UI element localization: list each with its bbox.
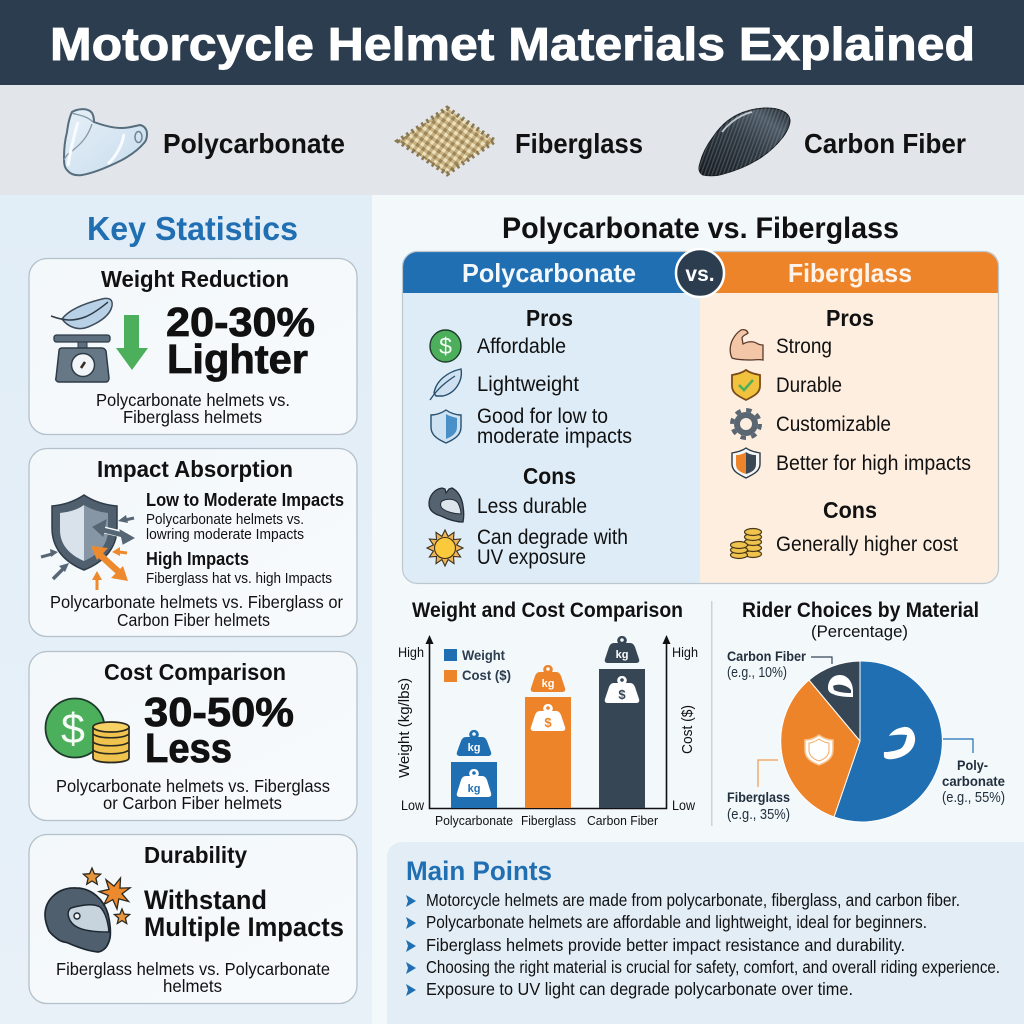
- bar: carbon fiber: kg: [616, 649, 628, 661]
- category labels: Polycarbonate: [435, 813, 513, 828]
- label: Fiberglass: Fiberglass: [515, 128, 643, 159]
- panel: weight reduction: [29, 258, 357, 434]
- caption: helmets: [163, 976, 222, 996]
- polycarbonate column: Can degrade with: [477, 526, 628, 549]
- fiberglass column: Customizable: [776, 413, 891, 436]
- icon: orange and dark shield: [732, 448, 760, 478]
- category labels: [435, 813, 659, 828]
- bar: fiberglass: $: [544, 715, 552, 730]
- legend: Cost ($): [462, 667, 511, 683]
- fiberglass column: Strong: [776, 335, 832, 358]
- axis labels: [397, 644, 698, 813]
- heading: comparison: Polycarbonate vs. Fiberglass: [502, 212, 899, 245]
- axis labels: High: [672, 644, 698, 660]
- label: polycarbonate: [942, 739, 1005, 806]
- panel: main points: [387, 842, 1024, 1024]
- label: fiberglass: Fiberglass: [727, 789, 790, 805]
- polycarbonate column: Lightweight: [477, 373, 579, 396]
- icon: sun: [427, 530, 463, 566]
- caption: or Carbon Fiber helmets: [103, 793, 282, 813]
- bar: carbon fiber: $: [618, 687, 626, 702]
- vs badge: vs.: [685, 263, 715, 286]
- chart: rider choices pie: (Percentage): [811, 622, 908, 641]
- bullet list: Exposure to UV light can degrade polycarbonate over time.: [426, 979, 853, 999]
- chart title: Rider Choices by Material: [742, 599, 979, 622]
- polycarbonate column: Less durable: [477, 495, 587, 518]
- label: fiberglass: [727, 760, 790, 823]
- bar: polycarbonate: kg: [468, 783, 480, 795]
- heading: Impact Absorption: [97, 456, 293, 482]
- axis labels: Low: [672, 797, 696, 813]
- fiberglass column: Fiberglass: [788, 258, 912, 288]
- icon: coin stacks: [730, 528, 762, 558]
- label: carbon fiber: Carbon Fiber: [727, 648, 806, 664]
- caption: Carbon Fiber helmets: [117, 610, 270, 630]
- icon: feather on scale: [51, 298, 112, 382]
- bar: carbon fiber: [599, 636, 645, 808]
- fiberglass column: Pros: [826, 305, 874, 331]
- materials strip: [0, 85, 1024, 195]
- icon: green down arrow: [116, 315, 148, 370]
- text: low to moderate: Low to Moderate Impacts: [146, 490, 344, 510]
- axes: [430, 642, 666, 808]
- pie slice: fiberglass 35%: [781, 680, 860, 817]
- fiberglass column: [700, 251, 999, 583]
- arrows: orange impacts: [91, 546, 128, 590]
- icon: shield with impact arrows: [41, 495, 134, 590]
- title banner: [0, 0, 1024, 85]
- fiberglass column: Better for high impacts: [776, 452, 971, 475]
- label: carbon fiber: (e.g., 10%): [727, 665, 787, 681]
- chart title: Weight and Cost Comparison: [412, 599, 683, 622]
- axis labels: Cost ($): [680, 705, 696, 754]
- vs badge: [676, 249, 724, 297]
- panel: cost comparison: Less: [145, 725, 232, 771]
- label: fiberglass: (e.g., 35%): [727, 807, 790, 823]
- caption: Fiberglass helmets vs. Polycarbonate: [56, 959, 330, 979]
- panel: comparison table: [402, 249, 999, 584]
- legend: [444, 647, 511, 683]
- stat: 20-30%: [166, 299, 315, 345]
- icon: dollar coin and stack: $: [61, 705, 85, 753]
- bar: fiberglass: kg: [542, 678, 554, 690]
- polycarbonate column: Cons: [523, 463, 576, 489]
- label: polycarbonate: Poly-: [957, 757, 988, 773]
- bar: fiberglass: [525, 665, 571, 808]
- icon: helmet with impact stars: [45, 868, 130, 952]
- bullet list: Motorcycle helmets are made from polycarbonate, fiberglass, and carbon fiber.: [426, 890, 960, 910]
- panel: weight reduction: Lighter: [167, 336, 308, 382]
- bullet list: Fiberglass helmets provide better impact resistance and durability.: [426, 935, 905, 955]
- polycarbonate column: Affordable: [477, 335, 566, 358]
- heading: Weight Reduction: [101, 266, 289, 292]
- panel: durability: Multiple Impacts: [144, 912, 344, 942]
- pie slice: carbon fiber 10%: [809, 661, 860, 741]
- bar: polycarbonate: kg: [468, 742, 480, 754]
- title banner: Motorcycle Helmet Materials Explained: [50, 18, 975, 70]
- heading: Key Statistics: Key Statistics: [87, 210, 298, 247]
- icon: feather: [430, 369, 461, 400]
- text: high impacts: Fiberglass hat vs. high Impacts: [146, 571, 332, 587]
- polycarbonate column: Pros: [526, 305, 573, 331]
- label: Carbon Fiber: Carbon Fiber: [804, 128, 966, 159]
- bullet list: [406, 890, 1000, 999]
- arrows: grey impacts: [41, 515, 134, 579]
- polycarbonate column: [403, 251, 700, 583]
- panel: impact absorption: [29, 448, 357, 636]
- label: carbon fiber: [727, 648, 832, 681]
- polycarbonate column: Polycarbonate: [462, 258, 636, 288]
- heading: Main Points: [406, 856, 552, 886]
- pie slice: polycarbonate 55%: [834, 661, 942, 822]
- icon: gold shield with check: [732, 370, 760, 400]
- label: Polycarbonate: Polycarbonate: [163, 128, 345, 159]
- text: low to moderate: [146, 490, 344, 543]
- text: high impacts: High Impacts: [146, 549, 249, 569]
- icon: blue shield: [431, 410, 461, 443]
- icon: carbon fiber shell: [699, 108, 790, 176]
- icon: gear: [732, 410, 760, 438]
- text: low to moderate: lowring moderate Impacts: [146, 527, 304, 543]
- stat: Withstand: [144, 885, 267, 915]
- fiberglass column: Cons: [823, 497, 877, 523]
- text: high impacts: [146, 549, 332, 587]
- label: polycarbonate: (e.g., 55%): [942, 790, 1005, 806]
- axis labels: High: [398, 644, 424, 660]
- heading: Cost Comparison: [104, 659, 286, 685]
- polycarbonate column: Good for low to: [477, 405, 608, 428]
- polycarbonate column: UV exposure: [477, 546, 586, 569]
- caption: Polycarbonate helmets vs.: [96, 390, 290, 410]
- icon: dollar: $: [439, 333, 452, 359]
- axis labels: Low: [401, 797, 425, 813]
- caption: Fiberglass helmets: [123, 407, 262, 427]
- text: low to moderate: Polycarbonate helmets vs.: [146, 512, 304, 528]
- category labels: Carbon Fiber: [587, 813, 659, 828]
- panel: durability: [29, 834, 357, 1004]
- legend: Weight: [462, 647, 505, 663]
- icon: flexed arm: [730, 330, 763, 360]
- category labels: Fiberglass: [521, 813, 576, 828]
- panel: cost comparison: [29, 652, 357, 820]
- icon: fiberglass weave: [398, 108, 495, 174]
- bullet list: Polycarbonate helmets are affordable and lightweight, ideal for beginners.: [426, 912, 927, 932]
- chart: weight and cost comparison: [397, 599, 698, 828]
- fiberglass column: Durable: [776, 374, 842, 397]
- icon: dollar coin and stack: [46, 698, 129, 762]
- chart: rider choices pie: [727, 599, 1005, 823]
- caption: [56, 776, 330, 813]
- heading: Durability: [144, 842, 247, 868]
- label: polycarbonate: carbonate: [942, 773, 1005, 789]
- caption: [56, 959, 330, 996]
- caption: Polycarbonate helmets vs. Fiberglass or: [50, 592, 343, 612]
- icon: polycarbonate visor: [64, 109, 147, 175]
- fiberglass column: Generally higher cost: [776, 533, 958, 556]
- caption: Polycarbonate helmets vs. Fiberglass: [56, 776, 330, 796]
- icon: dollar: [430, 330, 461, 362]
- bar: polycarbonate: [451, 730, 497, 808]
- caption: [50, 592, 343, 630]
- stat: 30-50%: [144, 689, 294, 735]
- polycarbonate column: moderate impacts: [477, 425, 632, 448]
- caption: [96, 390, 290, 427]
- icon: cracked helmet: [429, 488, 464, 522]
- axis labels: Weight (kg/lbs): [397, 678, 413, 778]
